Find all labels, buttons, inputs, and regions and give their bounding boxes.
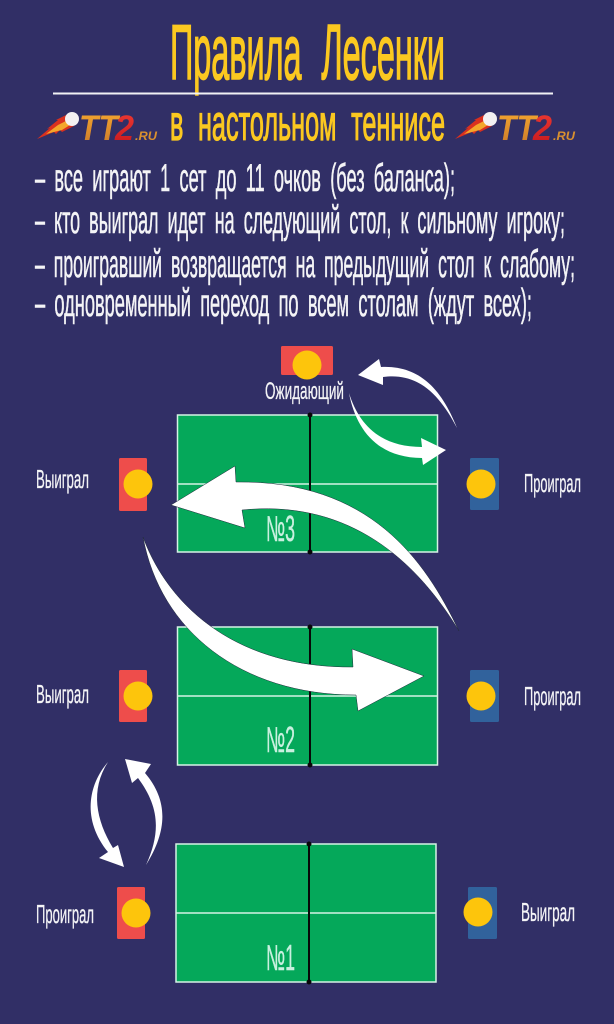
title underline <box>53 92 553 94</box>
arrow: table 3 to table 2 right <box>143 537 424 711</box>
player: table 2 left <box>119 670 152 722</box>
player: table 1 left <box>117 887 150 939</box>
arrow: right to waiting <box>358 359 457 428</box>
label: table 1 left: Проиграл <box>36 899 94 929</box>
table 1: №1 <box>266 937 295 978</box>
table 3: №3 <box>266 508 295 549</box>
table 3 <box>177 412 438 554</box>
player: waiting <box>265 346 344 405</box>
label: table 2 left: Выиграл <box>36 679 89 709</box>
logo: right <box>455 109 575 148</box>
player: table 1 right <box>464 887 497 939</box>
table 1 <box>176 842 436 984</box>
table 2: №2 <box>266 719 295 760</box>
player: table 2 right <box>466 670 499 722</box>
arrow: left down <box>91 762 124 867</box>
logo: left <box>37 109 157 148</box>
label: table 3 left: Выиграл <box>36 464 89 494</box>
arrow: table 2 to table 3 left <box>171 466 459 631</box>
logo: right: TT <box>497 109 538 148</box>
rules text <box>35 157 575 325</box>
logo: left: 2 <box>114 109 135 148</box>
arrow: waiting to right <box>349 393 446 465</box>
arrow: left up <box>125 759 162 865</box>
logo: right: .RU <box>553 129 575 143</box>
logo: left: .RU <box>135 129 157 143</box>
logo: left: TT <box>79 109 120 148</box>
player: table 3 left <box>119 458 152 511</box>
label: waiting: Ожидающий <box>265 378 344 405</box>
logo: right: 2 <box>532 109 553 148</box>
player: table 3 right <box>466 458 499 510</box>
table 2 <box>177 624 438 768</box>
